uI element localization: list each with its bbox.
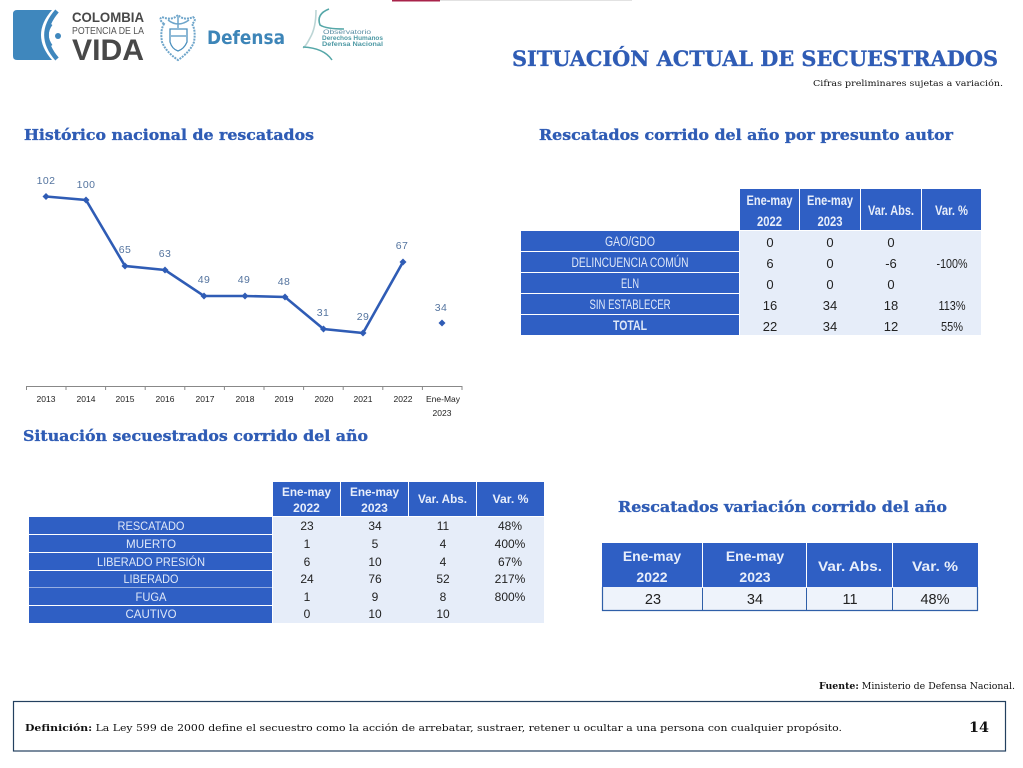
table: situation of kidnapped: 67%: [498, 555, 522, 569]
line chart: rescued by year: [26, 175, 462, 418]
table: rescued by alleged author: TOTAL: [613, 318, 647, 333]
heading: rescued by author: Rescatados corrido del año por presunto autor: [539, 126, 954, 144]
line chart: rescued by year: 49: [238, 274, 250, 286]
table: rescued by alleged author: 0: [826, 235, 834, 250]
page number: 14: [969, 720, 989, 736]
line chart: rescued by year: 2019: [275, 394, 294, 404]
table: rescued by alleged author: Var. Abs.: [868, 203, 914, 218]
line chart: rescued by year: 29: [357, 311, 369, 323]
line chart: rescued by year: 2016: [156, 394, 175, 404]
table: situation of kidnapped: 400%: [495, 537, 526, 551]
logo: Observatorio de Derechos Humanos: [303, 9, 384, 60]
table: rescued by alleged author: 16: [763, 298, 777, 313]
table: rescued variation: Ene-may: [726, 548, 784, 564]
table: situation of kidnapped: 10: [368, 555, 382, 569]
table: situation of kidnapped: 0: [304, 607, 311, 621]
line chart: rescued by year: 49: [198, 274, 210, 286]
line chart: rescued by year: 65: [119, 244, 131, 256]
subtitle note: Cifras preliminares sujetas a variación.: [813, 78, 1003, 89]
table: situation of kidnapped: 52: [436, 572, 450, 586]
table: rescued by alleged author: 55%: [941, 319, 963, 334]
table: rescued variation: Var. %: [912, 558, 959, 574]
table: situation of kidnapped: MUERTO: [126, 537, 176, 551]
table: rescued by alleged author: 0: [887, 277, 895, 292]
heading: rescued variation: Rescatados variación corrido del año: [618, 498, 947, 516]
table: situation of kidnapped: 2023: [361, 501, 388, 515]
source note: Fuente: Ministerio de Defensa Nacional.: [819, 682, 1015, 692]
logo: Observatorio de Derechos Humanos: Derechos Humanos: [322, 36, 384, 42]
line chart: rescued by year: 2015: [116, 394, 135, 404]
table: rescued variation: 2023: [739, 569, 771, 585]
line chart: rescued by year: 2013: [37, 394, 56, 404]
table: situation of kidnapped: 800%: [495, 590, 526, 604]
table: situation of kidnapped: LIBERADO: [124, 572, 178, 586]
table: situation of kidnapped: 11: [437, 519, 450, 533]
table: rescued by alleged author: 2022: [757, 214, 782, 229]
definition box: [14, 702, 1006, 751]
table: rescued by alleged author: 0: [766, 235, 774, 250]
table: rescued variation: [602, 543, 978, 610]
table: rescued by alleged author: DELINCUENCIA COMÚN: [572, 255, 688, 270]
table: situation of kidnapped: LIBERADO PRESIÓN: [97, 554, 205, 569]
table: situation of kidnapped: 10: [368, 607, 382, 621]
line chart: rescued by year: Ene-May: [426, 394, 461, 404]
table: rescued by alleged author: 0: [826, 256, 834, 271]
table: rescued by alleged author: SIN ESTABLECER: [590, 297, 671, 312]
line chart: rescued by year: 67: [396, 240, 408, 252]
line chart: rescued by year: 48: [278, 276, 290, 288]
table: situation of kidnapped: Var. Abs.: [418, 492, 467, 506]
table: rescued variation: 23: [645, 592, 661, 608]
logo: national shield: [160, 15, 195, 60]
table: situation of kidnapped: 4: [440, 555, 447, 569]
line chart: rescued by year: 2020: [315, 394, 334, 404]
line chart: rescued by year: 63: [159, 248, 171, 260]
line chart: rescued by year: 2014: [77, 394, 96, 404]
logo text: Defensa: Defensa: [207, 27, 285, 49]
table: situation of kidnapped: 10: [436, 607, 450, 621]
table: rescued by alleged author: ELN: [621, 276, 639, 291]
table: rescued by alleged author: Ene-may: [807, 193, 853, 208]
heading: situation of kidnapped: Situación secuestrados corrido del año: [23, 427, 368, 445]
table: situation of kidnapped: 24: [300, 572, 314, 586]
line chart: rescued by year: 2022: [394, 394, 413, 404]
table: rescued by alleged author: -100%: [936, 256, 968, 271]
table: situation of kidnapped: 1: [304, 537, 311, 551]
line chart: rescued by year: 100: [77, 179, 95, 191]
table: rescued by alleged author: Ene-may: [746, 193, 793, 208]
table: situation of kidnapped: 76: [368, 572, 382, 586]
heading: historical chart: Histórico nacional de rescatados: [24, 126, 314, 144]
line chart: rescued by year: 2017: [196, 394, 215, 404]
table: situation of kidnapped: 23: [300, 519, 314, 533]
table: situation of kidnapped: 1: [304, 590, 311, 604]
table: rescued variation: 34: [747, 592, 763, 608]
table: rescued variation: Var. Abs.: [818, 558, 882, 574]
table: situation of kidnapped: [29, 482, 544, 623]
table: rescued variation: 2022: [636, 569, 668, 585]
table: rescued by alleged author: 0: [766, 277, 774, 292]
logo: Observatorio de Derechos Humanos: Defensa Nacional: [322, 42, 383, 48]
table: rescued by alleged author: 2023: [818, 214, 843, 229]
logo: Observatorio de Derechos Humanos: Observatorio: [323, 30, 372, 36]
table: situation of kidnapped: 34: [368, 519, 382, 533]
table: situation of kidnapped: 217%: [495, 572, 526, 586]
line chart: rescued by year: 31: [317, 307, 329, 319]
table: rescued by alleged author: 113%: [938, 298, 966, 313]
table: situation of kidnapped: RESCATADO: [118, 519, 184, 533]
table: rescued by alleged author: Var. %: [935, 203, 968, 218]
definition box: Definición: La Ley 599 de 2000 define el secuestro como la acción de arrebatar, sustraer, retener u ocultar a una persona con cualquier propósito.: [25, 723, 842, 734]
table: rescued by alleged author: 18: [884, 298, 898, 313]
table: rescued by alleged author: 22: [763, 319, 777, 334]
logo: Colombia Potencia de la Vida: COLOMBIA: [72, 9, 144, 25]
title: SITUACIÓN ACTUAL DE SECUESTRADOS: [512, 46, 998, 71]
table: situation of kidnapped: 48%: [498, 519, 522, 533]
table: situation of kidnapped: Ene-may: [282, 485, 331, 499]
table: situation of kidnapped: 4: [440, 537, 447, 551]
table: rescued by alleged author: 6: [766, 256, 774, 271]
table: situation of kidnapped: 5: [372, 537, 379, 551]
line chart: rescued by year: 34: [435, 302, 447, 314]
logo: Colombia Potencia de la Vida: VIDA: [72, 34, 144, 67]
table: situation of kidnapped: 2022: [293, 501, 320, 515]
line chart: rescued by year: 2023: [433, 408, 452, 418]
table: situation of kidnapped: FUGA: [136, 590, 166, 604]
table: rescued variation: 48%: [920, 592, 950, 608]
line chart: rescued by year: 2021: [354, 394, 373, 404]
table: situation of kidnapped: 8: [440, 590, 447, 604]
table: situation of kidnapped: 9: [372, 590, 379, 604]
table: rescued by alleged author: 0: [826, 277, 834, 292]
logo: Colombia Potencia de la Vida: [13, 9, 144, 67]
logo: Colombia Potencia de la Vida: POTENCIA DE LA: [72, 25, 144, 37]
line chart: rescued by year: 2018: [236, 394, 255, 404]
table: situation of kidnapped: 6: [304, 555, 311, 569]
table: rescued by alleged author: 12: [884, 319, 898, 334]
table: rescued by alleged author: 34: [823, 298, 837, 313]
table: rescued by alleged author: [521, 189, 981, 335]
table: rescued by alleged author: -6: [885, 256, 897, 271]
line chart: rescued by year: 102: [37, 175, 55, 187]
table: situation of kidnapped: CAUTIVO: [126, 607, 176, 621]
table: rescued by alleged author: 0: [887, 235, 895, 250]
table: rescued by alleged author: 34: [823, 319, 837, 334]
table: situation of kidnapped: Var. %: [492, 492, 529, 506]
table: rescued variation: Ene-may: [623, 548, 681, 564]
table: rescued by alleged author: GAO/GDO: [605, 234, 655, 249]
table: rescued variation: 11: [842, 592, 858, 608]
table: situation of kidnapped: Ene-may: [350, 485, 399, 499]
